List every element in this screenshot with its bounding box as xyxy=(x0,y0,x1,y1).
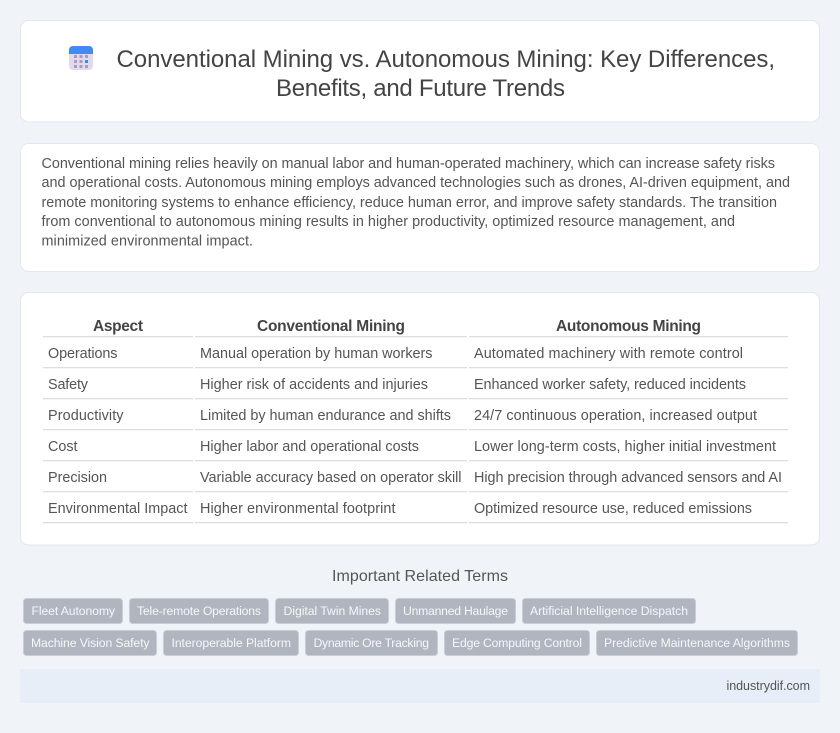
row: cost: Higher labor and operational costs xyxy=(200,439,419,455)
panel: header xyxy=(20,20,820,122)
row: environmental impact: Higher environmental footprint xyxy=(200,501,396,517)
tag: digital twin mines: Digital Twin Mines xyxy=(284,604,381,618)
row: precision: High precision through advanced sensors and AI xyxy=(474,470,782,486)
tag: machine vision safety xyxy=(24,630,156,656)
tag: unmanned haulage: Unmanned Haulage xyxy=(403,604,508,618)
row: precision: Precision xyxy=(48,470,107,486)
icon: calendar xyxy=(69,46,93,70)
table header row: Conventional Mining xyxy=(257,318,405,335)
row: operations xyxy=(48,346,743,362)
text block: description: and operational costs. Autonomous mining employs advanced technologies such as drones, AI-driven equipment, and xyxy=(42,175,790,191)
row: environmental impact: Environmental Impact xyxy=(48,501,188,517)
row: safety: Higher risk of accidents and injuries xyxy=(200,377,428,393)
row: productivity xyxy=(48,408,757,424)
text block: description: remote monitoring systems to enhance efficiency, reduce human error, and improve safety standards. The transition xyxy=(42,195,777,211)
tag: interoperable platform: Interoperable Platform xyxy=(172,636,291,650)
tag: interoperable platform xyxy=(164,630,298,656)
row: cost xyxy=(48,439,776,455)
table header row xyxy=(93,318,701,335)
row: environmental impact: Optimized resource use, reduced emissions xyxy=(474,501,752,517)
tag: unmanned haulage xyxy=(396,598,516,624)
tag: dynamic ore tracking xyxy=(306,630,438,656)
table header row: Aspect xyxy=(93,318,143,335)
tag: machine vision safety: Machine Vision Safety xyxy=(31,636,150,650)
title xyxy=(116,46,775,102)
row: precision: Variable accuracy based on operator skill xyxy=(200,470,462,486)
tag: tele-remote operations xyxy=(130,598,268,624)
row: safety xyxy=(48,377,746,393)
tag: artificial intelligence dispatch xyxy=(522,598,696,624)
row: productivity: Productivity xyxy=(48,408,124,424)
text block: description xyxy=(42,156,790,250)
row: cost: Lower long-term costs, higher initial investment xyxy=(474,439,776,455)
text block: description: Conventional mining relies heavily on manual labor and human-operated machinery, which can increase safety risks xyxy=(42,156,775,172)
title: Benefits, and Future Trends xyxy=(276,75,565,102)
tag: edge computing control: Edge Computing Control xyxy=(452,636,582,650)
row: safety: Safety xyxy=(48,377,89,393)
row: operations: Operations xyxy=(48,346,118,362)
panel: description xyxy=(20,144,820,272)
row: productivity: Limited by human endurance and shifts xyxy=(200,408,451,424)
row: safety: Enhanced worker safety, reduced incidents xyxy=(474,377,746,393)
panel: comparison table xyxy=(20,292,820,545)
tag: fleet autonomy xyxy=(24,598,122,624)
table header row: Autonomous Mining xyxy=(556,318,701,335)
row: precision xyxy=(48,470,782,486)
footer source text: industrydif.com xyxy=(726,679,810,693)
tag: artificial intelligence dispatch: Artificial Intelligence Dispatch xyxy=(530,604,688,618)
tag: tele-remote operations: Tele-remote Operations xyxy=(137,604,261,618)
tags: related terms xyxy=(24,598,798,656)
tag: dynamic ore tracking: Dynamic Ore Tracking xyxy=(314,636,429,650)
title: Conventional Mining vs. Autonomous Mining: Key Differences, xyxy=(116,46,775,73)
tag: fleet autonomy: Fleet Autonomy xyxy=(32,604,116,618)
row: cost: Cost xyxy=(48,439,78,455)
tag: digital twin mines xyxy=(276,598,388,624)
row: environmental impact xyxy=(48,501,752,517)
row: productivity: 24/7 continuous operation, increased output xyxy=(474,408,757,424)
text block: description: minimized environmental impact. xyxy=(42,234,253,250)
row: operations: Automated machinery with remote control xyxy=(474,346,743,362)
heading: related terms: Important Related Terms xyxy=(332,568,508,585)
footer xyxy=(20,669,820,703)
row: operations: Manual operation by human workers xyxy=(200,346,432,362)
tag: edge computing control xyxy=(444,630,590,656)
tag: predictive maintenance algorithms: Predictive Maintenance Algorithms xyxy=(604,636,790,650)
tag: predictive maintenance algorithms xyxy=(596,630,798,656)
text block: description: from conventional to autonomous mining results in higher productivity, optimized resource management, and xyxy=(42,214,735,230)
